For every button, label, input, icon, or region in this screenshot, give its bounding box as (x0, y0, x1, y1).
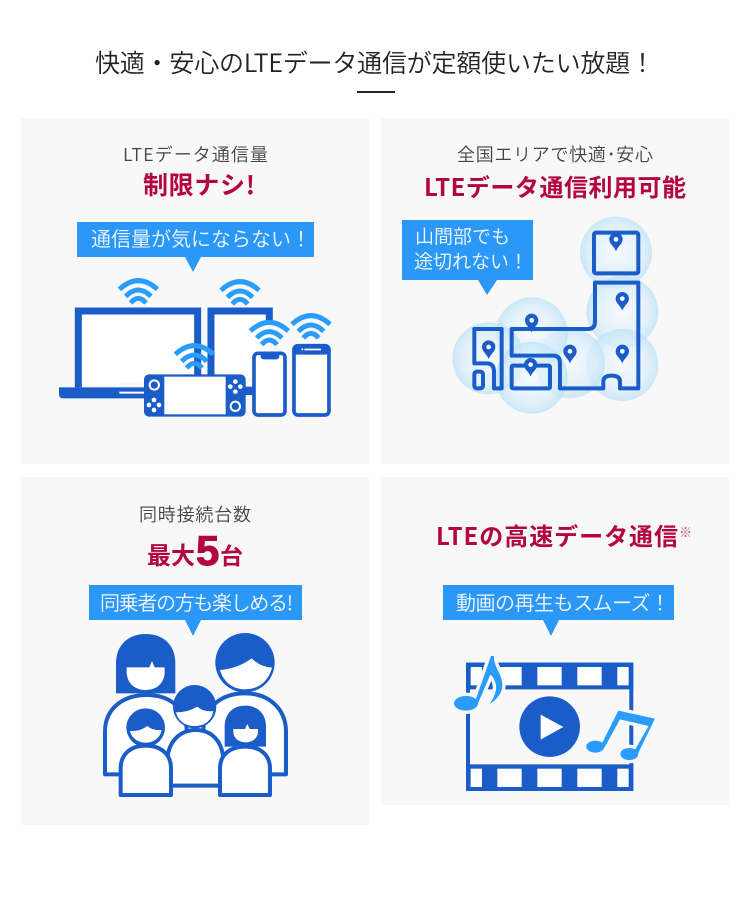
callout: mountain areas: 途切れない！ (414, 247, 528, 274)
heading: up to 5 devices (147, 527, 243, 574)
callout: smooth video: 動画の再生もスムーズ！ (456, 587, 670, 616)
heading: high-speed LTE: ※ (679, 522, 692, 541)
icon: film strip with music notes (454, 656, 655, 791)
heading: up to 5 devices: 最大 (147, 536, 195, 571)
icon: connected devices (59, 281, 330, 417)
heading: high-speed LTE: LTEの高速データ通信 (436, 517, 678, 552)
panel: simultaneous connections (21, 477, 369, 825)
callout: smooth video (443, 585, 674, 636)
callout: passengers: 同乗者の方も楽しめる! (100, 587, 293, 616)
icon: map of Japan (452, 217, 658, 414)
callout: mountain areas (402, 220, 533, 295)
title: 快適・安心のLTEデータ通信が定額使いたい放題！ (95, 44, 655, 80)
callout: passengers (89, 585, 302, 636)
icon: family (105, 633, 286, 795)
callout: mountain areas: 山間部でも (415, 222, 510, 249)
heading: up to 5 devices: 5 (196, 527, 219, 574)
callout: no worries (77, 222, 314, 272)
heading: nationwide: 全国エリアで快適･安心 (457, 141, 653, 167)
heading: data volume: LTEデータ通信量 (123, 141, 268, 167)
panel: unlimited data (21, 118, 369, 464)
heading: connected devices: 同時接続台数 (139, 501, 251, 527)
heading: no limits: 制限ナシ! (143, 166, 255, 202)
heading: LTE available: LTEデータ通信利用可能 (424, 168, 686, 203)
heading: up to 5 devices: 台 (220, 537, 243, 571)
panel: high-speed video (381, 477, 729, 805)
panel: nationwide coverage (381, 118, 729, 464)
callout: no worries: 通信量が気にならない！ (91, 223, 311, 252)
